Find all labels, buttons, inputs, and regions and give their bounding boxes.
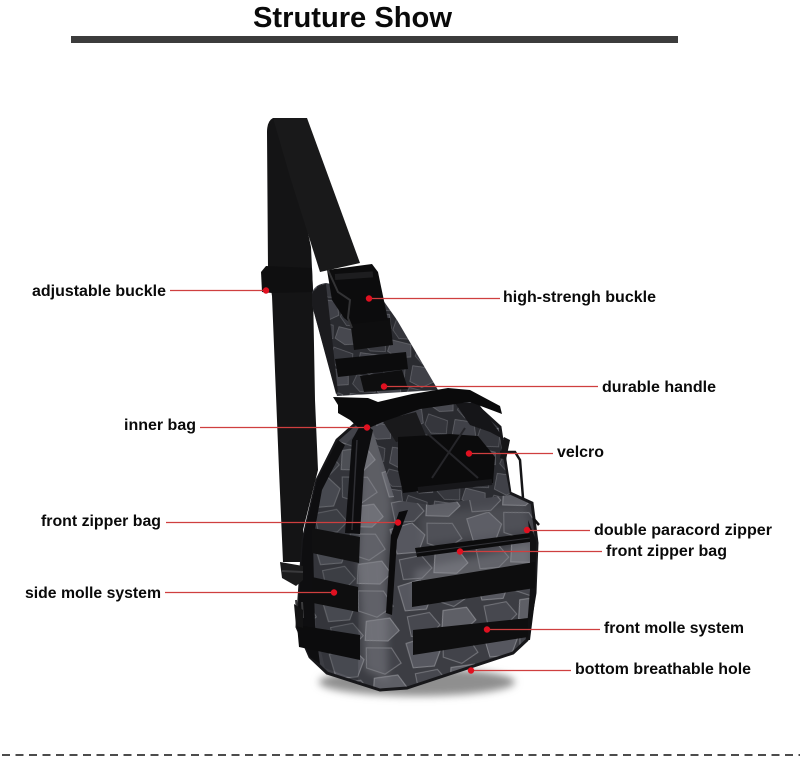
callout: high-strengh buckle xyxy=(366,289,656,306)
paracord pull xyxy=(500,452,523,498)
callout: bottom breathable hole xyxy=(468,661,751,678)
callout: side molle system xyxy=(25,585,337,602)
high-strength buckle xyxy=(327,264,388,328)
dashed divider xyxy=(2,754,800,756)
callout: bottom breathable hole: bottom breathable hole xyxy=(575,661,751,678)
callout: side molle system: side molle system xyxy=(25,585,161,602)
side panel shading xyxy=(313,430,360,680)
callout: adjustable buckle xyxy=(32,283,269,300)
callout: adjustable buckle: adjustable buckle xyxy=(32,283,166,300)
zipper pull tab xyxy=(533,518,539,525)
callout: high-strengh buckle: high-strengh buckle xyxy=(503,289,656,306)
zipper toggle xyxy=(500,437,510,460)
rear shoulder strap xyxy=(267,118,318,562)
callout: velcro: velcro xyxy=(557,444,604,461)
velcro patch xyxy=(398,428,495,493)
front pocket zipper xyxy=(415,533,530,557)
title: Struture Show xyxy=(253,2,452,34)
callout: durable handle: durable handle xyxy=(602,379,716,396)
front side zipper xyxy=(386,510,408,615)
strap end tab xyxy=(294,604,303,628)
strap buckle xyxy=(280,562,303,586)
bag photo illustration xyxy=(261,118,539,696)
callout: durable handle xyxy=(381,379,716,396)
adjustable strap slider xyxy=(261,266,313,293)
callout: inner bag xyxy=(124,417,370,434)
rear edge band xyxy=(297,440,345,664)
bag body xyxy=(297,397,537,690)
centre gusset highlight xyxy=(358,425,392,682)
upper front panel xyxy=(372,402,510,505)
callout: velcro xyxy=(466,444,604,461)
side molle webbing xyxy=(297,528,360,660)
ground shadow xyxy=(319,668,515,696)
shoulder pad xyxy=(312,283,438,396)
callout: front molle system xyxy=(484,620,744,637)
callout: front zipper bag left xyxy=(41,513,401,530)
front pouch highlight xyxy=(414,545,532,600)
front molle webbing xyxy=(412,562,535,655)
right edge binding xyxy=(526,520,536,640)
side carabiner xyxy=(282,571,303,620)
title rule xyxy=(71,36,678,43)
callout: inner bag: inner bag xyxy=(124,417,196,434)
callout: front molle system: front molle system xyxy=(604,620,744,637)
callout: front zipper bag right: front zipper bag xyxy=(606,543,727,560)
callout: front zipper bag right xyxy=(457,543,727,560)
callout: double paracord zipper: double paracord zipper xyxy=(594,522,772,539)
top handle and main zipper xyxy=(333,388,502,534)
callout: front zipper bag left: front zipper bag xyxy=(41,513,161,530)
front shoulder strap xyxy=(273,118,360,272)
